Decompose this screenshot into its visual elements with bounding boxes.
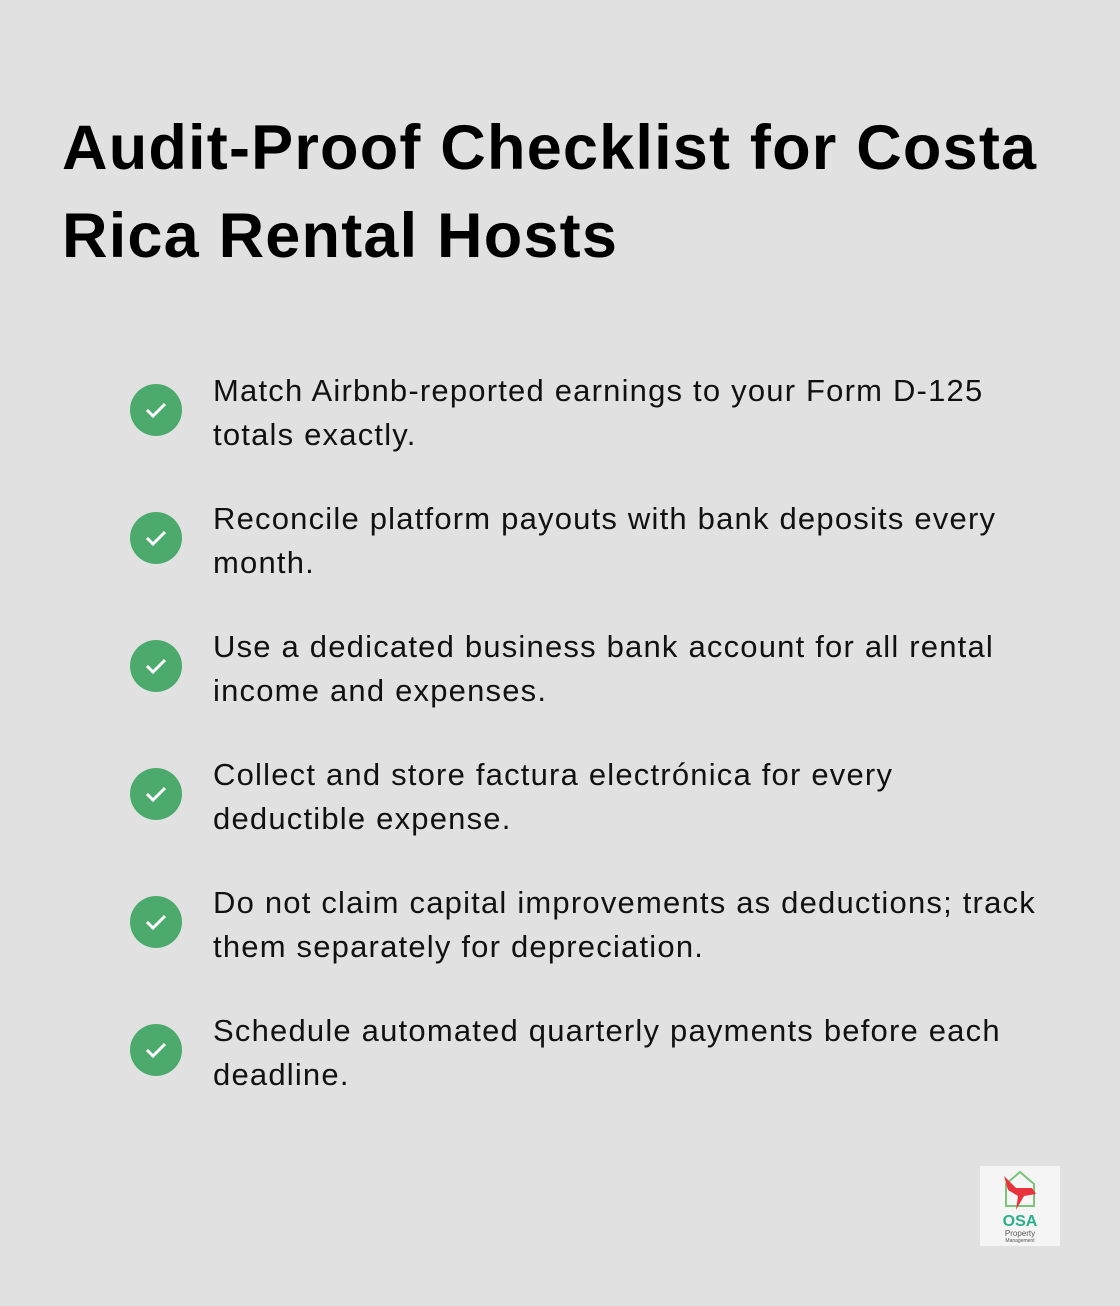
logo: Management bbox=[1005, 1238, 1035, 1244]
checklist item 2: Reconcile platform payouts with bank deposits every bbox=[213, 501, 996, 536]
title: Rica Rental Hosts bbox=[62, 201, 618, 271]
checklist item 2: month. bbox=[213, 545, 315, 580]
checklist item 6 bbox=[130, 1013, 1001, 1092]
logo bbox=[980, 1166, 1060, 1246]
checklist item 6: Schedule automated quarterly payments before each bbox=[213, 1013, 1001, 1048]
checklist item 1: Match Airbnb-reported earnings to your Form D-125 bbox=[213, 373, 983, 408]
checklist item 1: totals exactly. bbox=[213, 417, 417, 452]
checklist item 4 bbox=[130, 757, 893, 836]
checklist item 1 bbox=[130, 373, 983, 452]
logo: OSA bbox=[1003, 1213, 1038, 1230]
checklist item 3: Use a dedicated business bank account for all rental bbox=[213, 629, 994, 664]
title: Audit-Proof Checklist for Costa bbox=[62, 113, 1037, 183]
checklist item 5 bbox=[130, 885, 1036, 964]
checklist item 3 bbox=[130, 629, 994, 708]
checklist item 5: them separately for depreciation. bbox=[213, 929, 704, 964]
checklist item 3: income and expenses. bbox=[213, 673, 547, 708]
checklist item 2 bbox=[130, 501, 996, 580]
checklist item 4: Collect and store factura electrónica for every bbox=[213, 757, 893, 792]
checklist item 6: deadline. bbox=[213, 1057, 350, 1092]
checklist item 4: deductible expense. bbox=[213, 801, 512, 836]
title bbox=[62, 113, 1037, 271]
logo: Property bbox=[1005, 1229, 1035, 1238]
checklist item 5: Do not claim capital improvements as deductions; track bbox=[213, 885, 1036, 920]
